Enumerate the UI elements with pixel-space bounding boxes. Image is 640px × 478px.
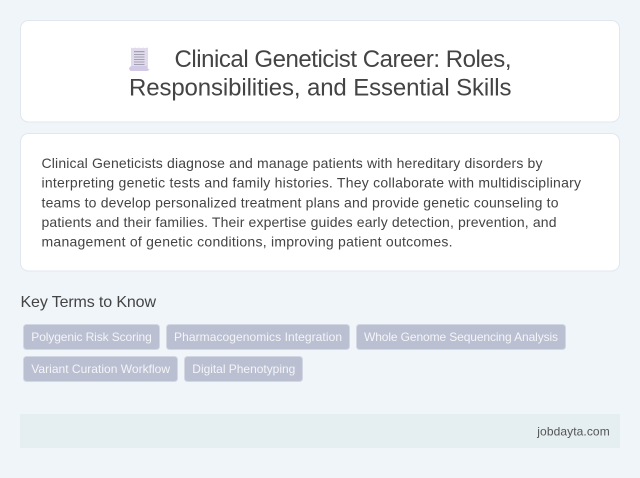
tag: polygenic risk scoring: Polygenic Risk Scoring (31, 330, 152, 344)
description text (42, 155, 581, 250)
icon: document scroll (129, 48, 150, 71)
description text: patients and their families. Their expertise guides early detection, prevention, and (42, 214, 556, 230)
tag: pharmacogenomics integration (166, 324, 350, 350)
tag: polygenic risk scoring (24, 324, 160, 350)
description text: Clinical Geneticists diagnose and manage patients with hereditary disorders by (42, 155, 542, 171)
tag: pharmacogenomics integration: Pharmacogenomics Integration (174, 330, 342, 344)
panel: title card (20, 20, 620, 122)
tag: whole genome sequencing analysis (356, 324, 566, 350)
tag: variant curation workflow (24, 356, 178, 382)
heading: key terms: Key Terms to Know (20, 294, 156, 311)
description text: management of genetic conditions, improving patient outcomes. (42, 234, 452, 250)
key term tags (24, 324, 566, 382)
footer source text: jobdayta.com (536, 424, 610, 438)
title: Responsibilities, and Essential Skills (129, 74, 512, 102)
tag: variant curation workflow: Variant Curation Workflow (31, 362, 170, 376)
description text: teams to develop personalized treatment plans and provide genetic counseling to (42, 194, 559, 210)
panel: description card (20, 134, 620, 271)
tag: digital phenotyping: Digital Phenotyping (192, 362, 295, 376)
tag: digital phenotyping (184, 356, 302, 382)
tag: whole genome sequencing analysis: Whole Genome Sequencing Analysis (364, 330, 558, 344)
title: Clinical Geneticist Career: Roles, (174, 46, 512, 73)
title (129, 46, 512, 102)
footer bar (20, 414, 620, 448)
description text: interpreting genetic tests and family histories. They collaborate with multidisciplinary (42, 174, 581, 190)
